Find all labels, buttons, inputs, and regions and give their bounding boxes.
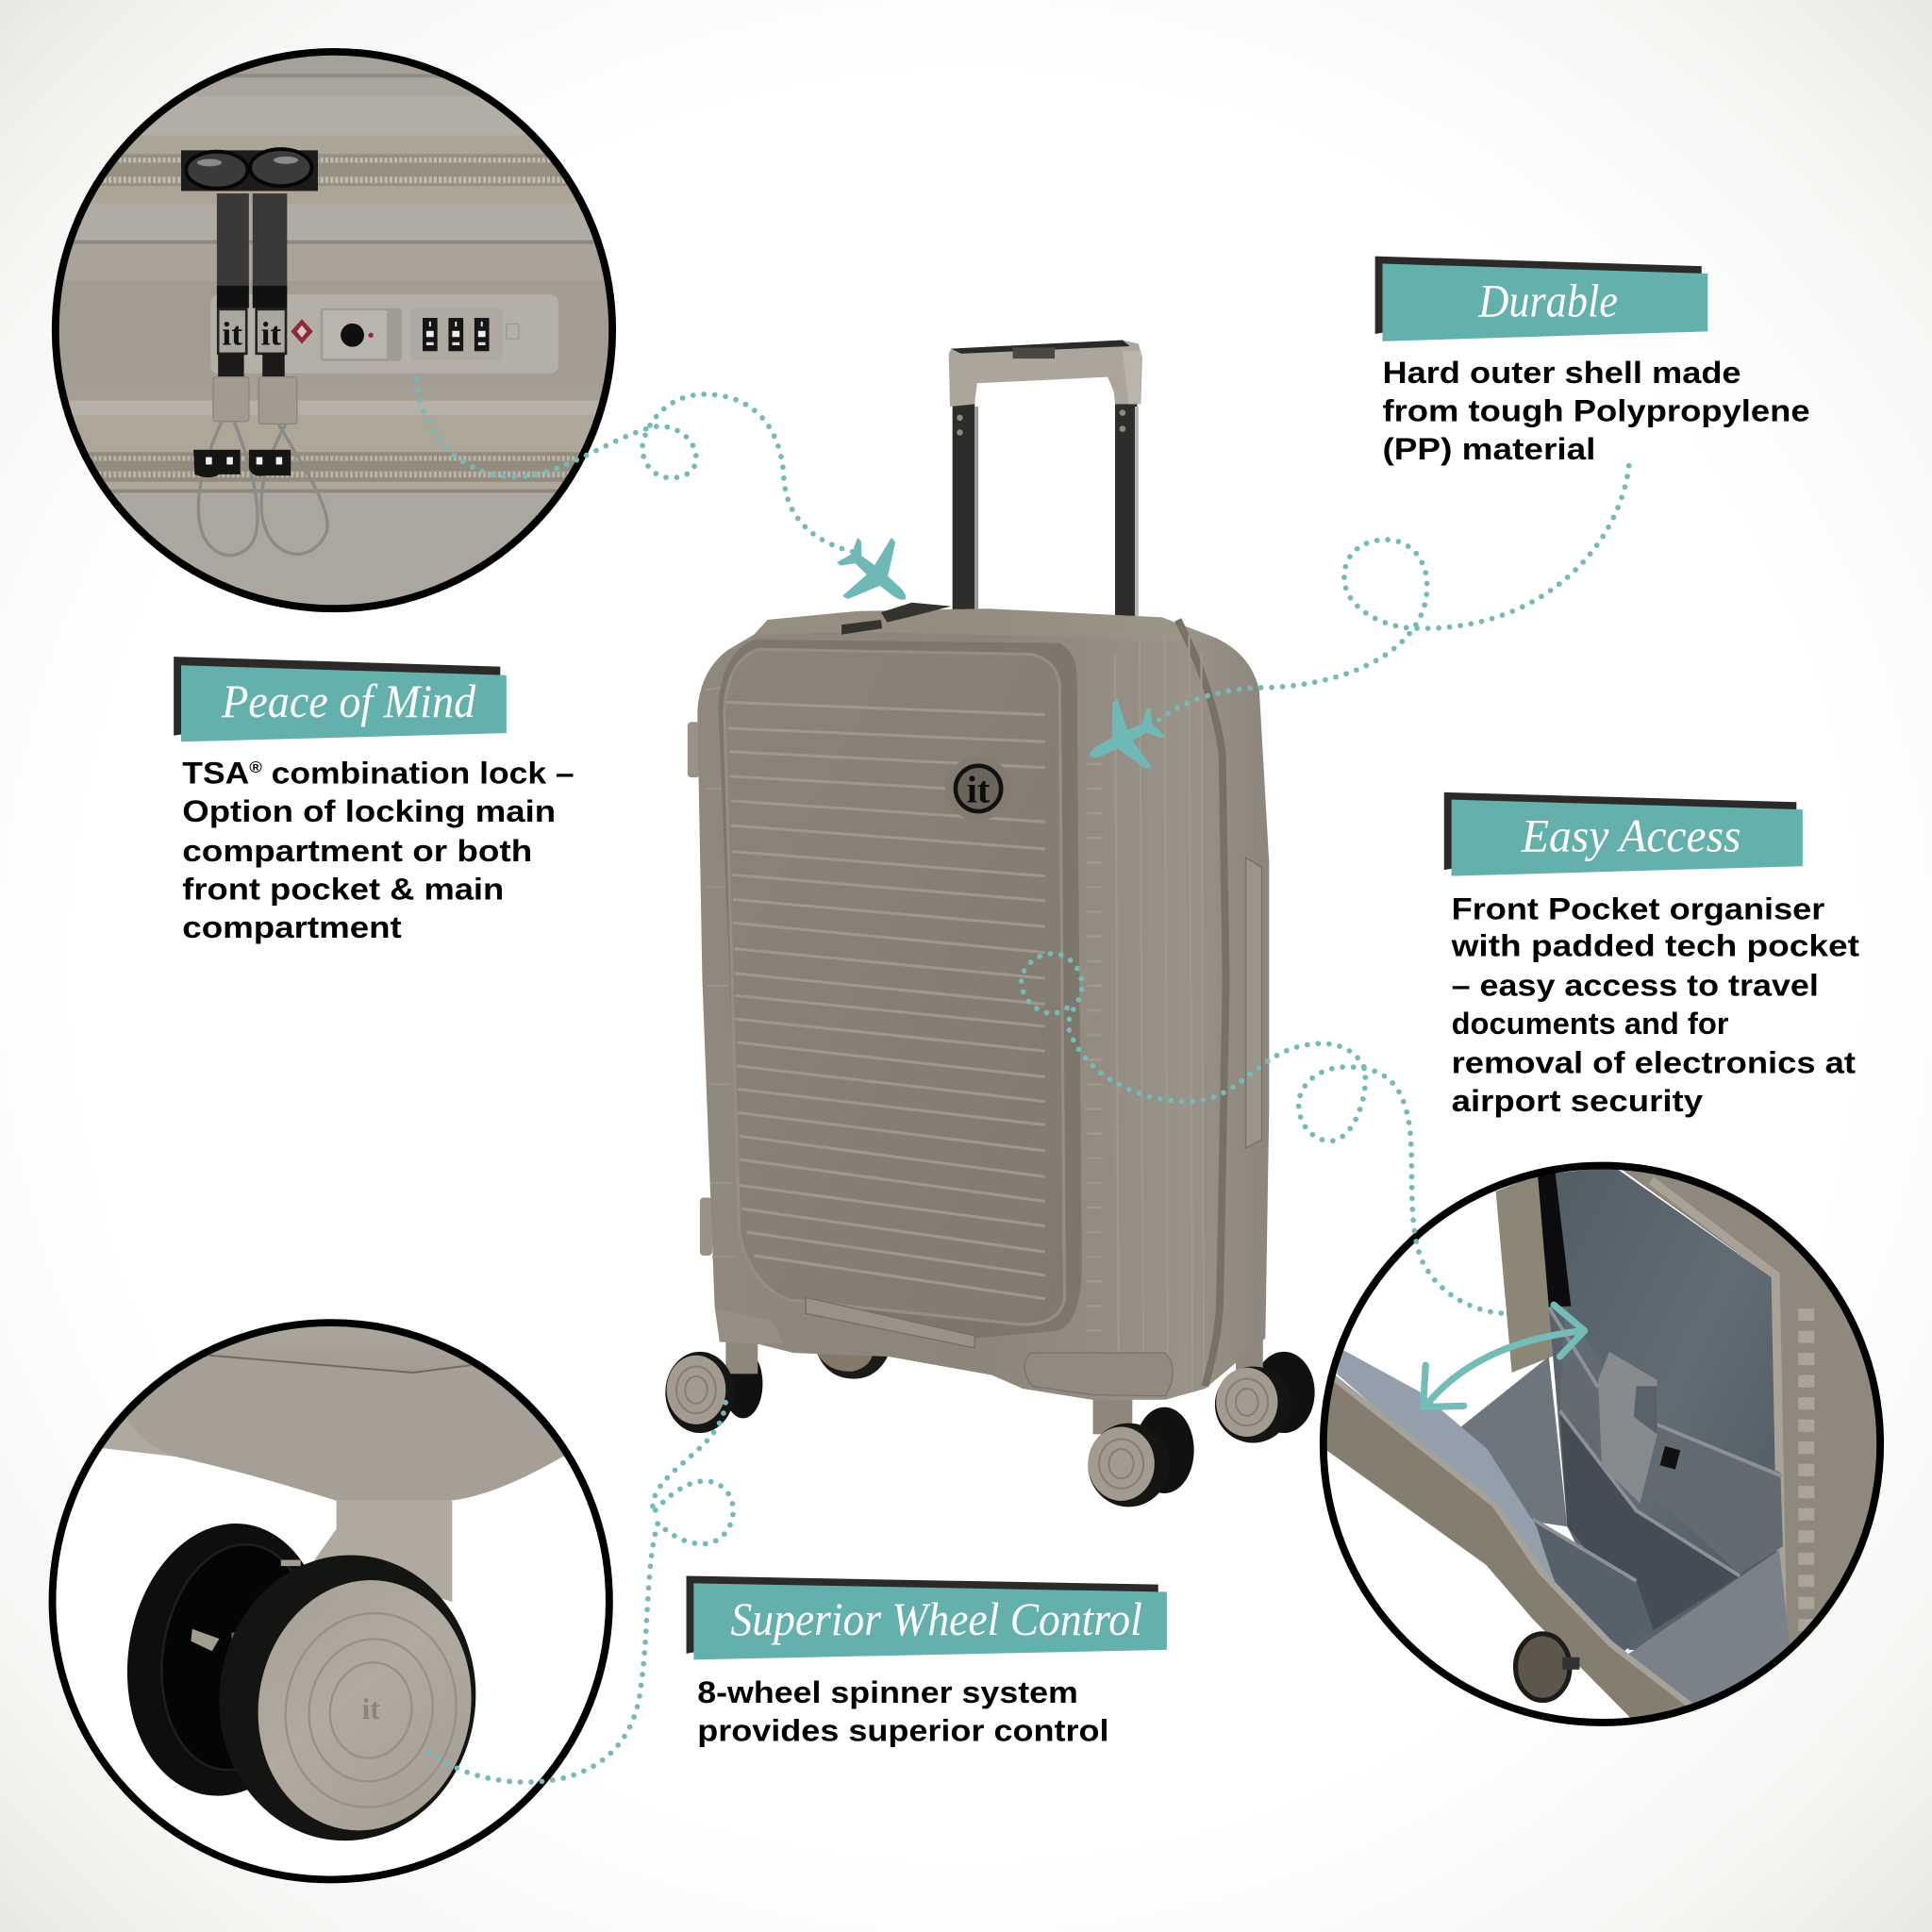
front wheel hub (258, 1580, 472, 1830)
pocket ladder ribs (1087, 764, 1103, 1331)
icon: plane near handle (823, 521, 930, 628)
side handle (1245, 858, 1261, 1148)
callout: Easy Access: documents and for (1452, 1006, 1729, 1041)
upper zipper (91, 136, 577, 204)
zipper strip (1496, 1172, 1555, 1373)
main zipper (1178, 620, 1226, 1386)
callout: Durable: Durable (1477, 275, 1618, 327)
callout: Easy Access: Easy Access (1521, 810, 1741, 862)
suitcase body shell (697, 608, 1269, 1400)
circle: front pocket organiser close-up (1306, 1158, 1897, 1750)
side bumpers (688, 722, 712, 1256)
front centre wheel (1088, 1424, 1170, 1507)
it zipper tags: it (261, 316, 281, 353)
callout: Superior Wheel Control: Superior Wheel Control (731, 1593, 1142, 1645)
callout: Peace of Mind: Option of locking main (182, 793, 556, 828)
top zipper pullers (841, 603, 951, 635)
dotted route: durable to plane (1146, 466, 1629, 733)
panel stripes (727, 702, 1045, 1299)
front left wheel (665, 1352, 734, 1433)
circle: lock close-up (49, 49, 619, 616)
callout: Durable: (PP) material (1382, 431, 1595, 466)
grey pull tabs (213, 377, 297, 424)
callout: Peace of Mind: front pocket & main (182, 871, 504, 906)
left lining pocket (1457, 1357, 1567, 1526)
shell ladder ribs (1800, 1308, 1812, 1639)
circle: wheel close-up (49, 1306, 616, 1879)
callout: Peace of Mind: TSA (182, 756, 244, 791)
callout: Superior Wheel Control: provides superior control (697, 1713, 1109, 1748)
brand logo badge (945, 757, 1011, 821)
callout: Durable: from tough Polypropylene (1382, 393, 1810, 428)
callout: Superior Wheel Control: 8-wheel spinner system (697, 1674, 1078, 1709)
it zipper tags: it (222, 316, 242, 353)
callout: Easy Access: airport security (1452, 1083, 1703, 1118)
bottom right foot (1024, 1353, 1173, 1396)
telescopic handle (949, 340, 1142, 617)
dotted route: wheels (429, 1392, 733, 1782)
front right wheel (1215, 1366, 1291, 1442)
callout: Easy Access: – easy access to travel (1452, 967, 1819, 1002)
grey strap loop (1598, 1352, 1657, 1503)
wheel stems (725, 1337, 1263, 1434)
callout: Easy Access: removal of electronics at (1452, 1045, 1856, 1080)
rear wheels (724, 1349, 1315, 1493)
callout: Durable: Hard outer shell made (1382, 355, 1741, 390)
left side ribs (705, 688, 736, 1257)
brand label (1660, 1446, 1680, 1470)
suitcase product image (665, 340, 1315, 1507)
wheel stem (309, 1501, 452, 1602)
lower left pouch (1533, 1519, 1654, 1651)
callout: Easy Access: with padded tech pocket (1450, 928, 1859, 963)
open lid shell (1326, 1382, 1686, 1718)
front pocket panel (724, 649, 1064, 1324)
upper mesh pocket (1560, 1306, 1783, 1574)
lower right lining (1628, 1550, 1790, 1704)
icon: plane on suitcase side (1073, 688, 1175, 791)
pocket pull bar (806, 1297, 974, 1348)
right shell wall (1623, 1170, 1877, 1645)
dotted route: lock to plane (416, 379, 854, 552)
callout: Peace of Mind: Peace of Mind (221, 675, 475, 727)
open lid lining (1337, 1349, 1558, 1595)
callout: Superior Wheel Control (687, 1576, 1167, 1748)
padded back panel (1544, 1167, 1783, 1654)
dotted route: easy access (1022, 954, 1506, 1313)
lower front tray (717, 1308, 784, 1344)
front pocket zipper surround (718, 640, 1082, 1338)
callout: Peace of Mind: compartment or both (182, 833, 532, 868)
base shell (102, 1355, 564, 1501)
callout: Durable (1375, 257, 1810, 466)
lower zipper pulls (193, 450, 291, 477)
callout: Easy Access (1444, 792, 1859, 1118)
top rim highlight (754, 608, 1214, 643)
brand logo badge: it (967, 768, 991, 810)
right side vertical ribs (1115, 635, 1204, 1392)
callout: Peace of Mind: compartment (182, 909, 402, 944)
front wheel hub: it (362, 1692, 380, 1725)
callout: Easy Access: Front Pocket organiser (1452, 891, 1825, 925)
lock panel (210, 294, 558, 374)
callout: Peace of Mind (174, 657, 575, 944)
callout: Peace of Mind: combination lock – (262, 756, 575, 791)
wire loops (198, 422, 327, 556)
access arrow (1424, 1305, 1585, 1407)
front wheel tyre (219, 1555, 475, 1841)
dark tech pocket (1560, 1411, 1740, 1630)
rear wheel (126, 1524, 304, 1796)
it zipper tags (218, 309, 286, 378)
zipper pull top (181, 149, 318, 308)
lower zipper (74, 415, 594, 482)
callout: Peace of Mind: ® (249, 758, 262, 776)
small wheel (1516, 1634, 1579, 1700)
pocket piping (1549, 1307, 1782, 1576)
